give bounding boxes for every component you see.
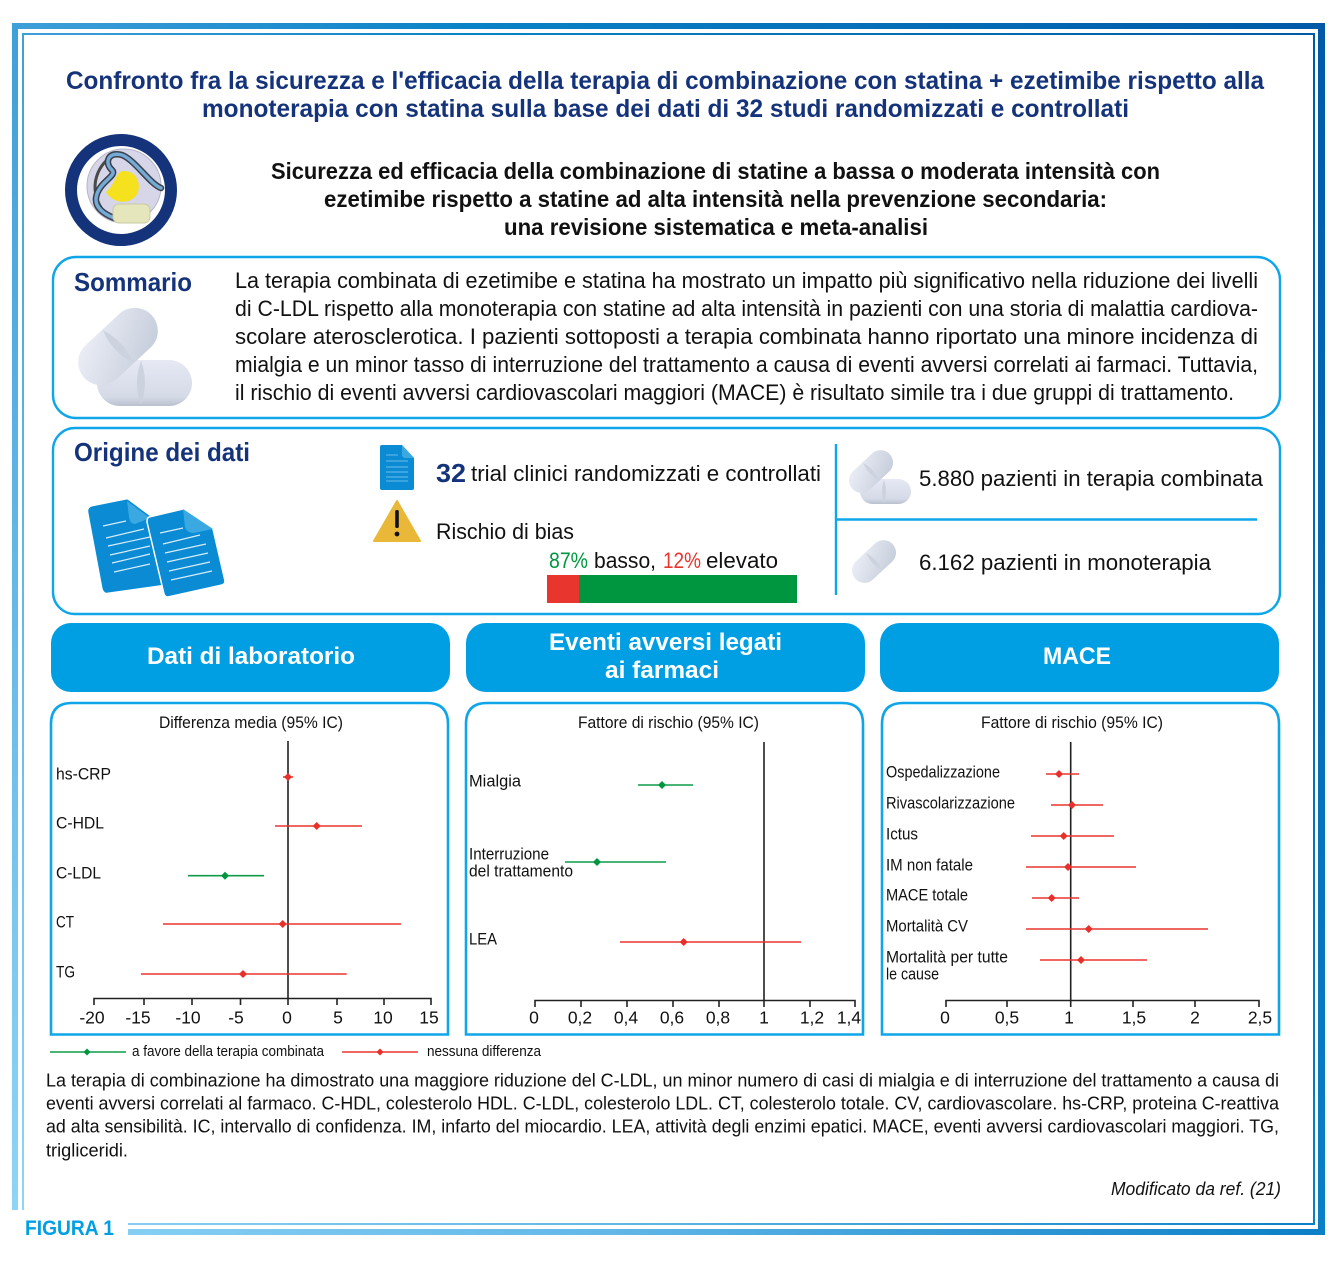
chart: dati di laboratorio: 10	[373, 1008, 393, 1028]
chart: dati di laboratorio: -20	[79, 1008, 105, 1028]
chart: eventi avversi: 1,4	[837, 1008, 861, 1028]
chart: dati di laboratorio: TG	[56, 962, 75, 982]
trial count: trial clinici randomizzati e controllati	[471, 461, 821, 486]
chart: eventi avversi: Mialgia	[469, 772, 522, 790]
header: dati di laboratorio	[51, 623, 450, 692]
risk of bias values: basso,	[594, 548, 656, 573]
chart: dati di laboratorio: hs-CRP	[56, 764, 111, 784]
main title	[66, 67, 1265, 123]
chart: mace: Ospedalizzazione	[886, 762, 1000, 782]
heading: origine dei dati: Origine dei dati	[74, 437, 250, 467]
risk of bias values: 12%	[663, 548, 701, 573]
summary text: La terapia combinata di ezetimibe e statina ha mostrato un impatto più significativo nella riduzione dei livelli	[235, 268, 1258, 293]
chart: dati di laboratorio	[51, 703, 448, 1034]
icon: two pills small	[844, 445, 911, 504]
source note: Modificato da ref. (21)	[1111, 1179, 1281, 1199]
main title: Confronto fra la sicurezza e l'efficacia della terapia di combinazione con statina + ezetimibe rispetto alla	[66, 67, 1265, 95]
risk of bias heading: Rischio di bias	[436, 519, 574, 544]
header: dati di laboratorio: Dati di laboratorio	[147, 643, 355, 670]
chart: eventi avversi: 0,6	[660, 1008, 684, 1028]
risk of bias values: elevato	[706, 548, 778, 573]
footnote text: eventi avversi correlati al farmaco. C-HDL, colesterolo HDL. C-LDL, colesterolo LDL. CT, colesterolo totale. CV, cardiovascolare. hs-CRP, proteina C-reattiva	[46, 1092, 1280, 1114]
chart: mace: 1	[1064, 1008, 1074, 1028]
figure label: FIGURA 1	[25, 1217, 114, 1240]
monotherapy patients: 6.162 pazienti in monoterapia	[919, 550, 1212, 575]
panel: origine dei dati	[53, 428, 1280, 614]
trial count: 32	[436, 458, 466, 488]
bar: risk of bias	[547, 575, 797, 603]
chart: dati di laboratorio: -15	[125, 1008, 151, 1028]
chart: mace	[882, 703, 1279, 1034]
footnote text: ad alta sensibilità. IC, intervallo di confidenza. IM, infarto del miocardio. LEA, attività degli enzimi epatici. MACE, eventi avversi cardiovascolari maggiori. TG,	[46, 1116, 1279, 1136]
chart: dati di laboratorio: 5	[333, 1008, 343, 1028]
chart: dati di laboratorio: C-HDL	[56, 814, 104, 832]
chart: mace: Mortalità CV	[886, 916, 969, 936]
chart: eventi avversi: 1	[759, 1008, 769, 1028]
icon: documents	[90, 501, 225, 597]
header: mace	[880, 623, 1279, 692]
legend: nessuna differenza	[427, 1044, 542, 1060]
chart: dati di laboratorio: 0	[282, 1008, 292, 1028]
icon: single pill	[847, 535, 901, 588]
chart: mace: le cause	[886, 964, 939, 984]
subtitle: Sicurezza ed efficacia della combinazione di statine a bassa o moderata intensità con	[271, 158, 1160, 184]
heading: sommario: Sommario	[74, 267, 192, 297]
chart: eventi avversi: Fattore di rischio (95% IC)	[578, 713, 759, 732]
summary text: mialgia e un minor tasso di interruzione del trattamento a causa di eventi avversi correlati ai farmaci. Tuttavia,	[235, 352, 1258, 377]
chart: mace: 0	[940, 1008, 950, 1028]
icon: journal logo	[71, 140, 171, 240]
chart: dati di laboratorio: Differenza media (95% IC)	[159, 713, 343, 732]
risk of bias values	[549, 548, 778, 573]
chart: mace: Rivascolarizzazione	[886, 794, 1015, 812]
main title: monoterapia con statina sulla base dei dati di 32 studi randomizzati e controllati	[202, 95, 1129, 123]
header: eventi avversi: ai farmaci	[605, 657, 719, 684]
summary text: il rischio di eventi avversi cardiovascolari maggiori (MACE) è risultato simile tra i due gruppi di trattamento.	[235, 380, 1234, 405]
chart: dati di laboratorio: C-LDL	[56, 864, 101, 882]
header: eventi avversi	[466, 623, 865, 692]
icon: warning	[374, 501, 420, 541]
legend	[50, 1044, 542, 1060]
chart: mace: MACE totale	[886, 886, 968, 904]
risk of bias values: 87%	[549, 548, 588, 573]
summary text	[235, 268, 1258, 405]
subtitle	[271, 158, 1160, 240]
footnote text: trigliceridi.	[46, 1140, 128, 1160]
chart: eventi avversi: 0	[529, 1008, 539, 1028]
chart: eventi avversi: 0,2	[568, 1008, 592, 1028]
legend: a favore della terapia combinata	[132, 1044, 325, 1060]
summary text: scolare aterosclerotica. I pazienti sottoposti a terapia combinata hanno riportato una minore incidenza di	[235, 324, 1258, 349]
chart: dati di laboratorio: CT	[56, 912, 74, 932]
footnote text	[46, 1070, 1280, 1160]
chart: mace: IM non fatale	[886, 856, 973, 874]
chart: mace: Mortalità per tutte	[886, 948, 1008, 966]
subtitle: una revisione sistematica e meta-analisi	[504, 214, 928, 240]
chart: eventi avversi: LEA	[469, 930, 498, 948]
subtitle: ezetimibe rispetto a statine ad alta intensità nella prevenzione secondaria:	[324, 186, 1107, 212]
header: eventi avversi: Eventi avversi legati	[549, 629, 782, 656]
chart: mace: Fattore di rischio (95% IC)	[981, 713, 1163, 732]
chart: eventi avversi: 0,4	[614, 1008, 638, 1028]
header: mace: MACE	[1043, 643, 1111, 670]
chart: eventi avversi: Interruzione	[469, 844, 549, 864]
panel: sommario	[53, 257, 1280, 418]
chart: eventi avversi: del trattamento	[469, 862, 573, 880]
chart: mace: 2	[1190, 1008, 1200, 1028]
icon: two pills	[69, 298, 192, 406]
chart: dati di laboratorio: -5	[228, 1008, 244, 1028]
chart: mace: 2,5	[1248, 1008, 1272, 1028]
chart: mace: 0,5	[995, 1008, 1019, 1028]
chart: eventi avversi: 1,2	[800, 1008, 824, 1028]
icon: document	[380, 445, 414, 490]
chart: mace: Ictus	[886, 824, 918, 844]
summary text: di C-LDL rispetto alla monoterapia con statine ad alta intensità in pazienti con una storia di malattia cardiova-	[235, 296, 1258, 321]
chart: eventi avversi	[466, 703, 863, 1034]
chart: mace: 1,5	[1122, 1008, 1146, 1028]
chart: dati di laboratorio: -10	[175, 1008, 201, 1028]
combination therapy patients: 5.880 pazienti in terapia combinata	[919, 466, 1264, 491]
chart: eventi avversi: 0,8	[706, 1008, 730, 1028]
footnote text: La terapia di combinazione ha dimostrato una maggiore riduzione del C-LDL, un minor numero di casi di mialgia e di interruzione del trattamento a causa di	[46, 1070, 1279, 1090]
chart: dati di laboratorio: 15	[419, 1008, 439, 1028]
